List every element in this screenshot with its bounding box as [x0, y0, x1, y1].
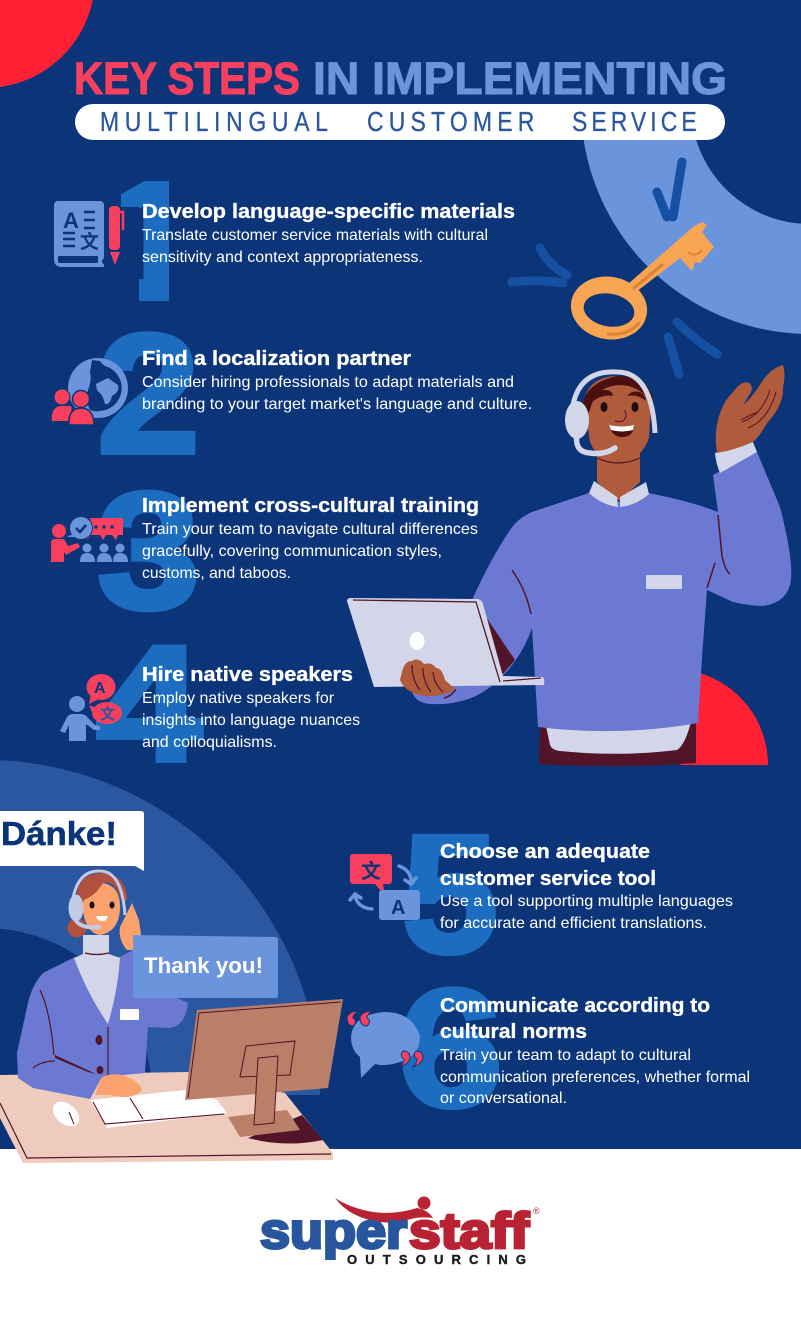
step 1 text: Develop language-specific materials — [142, 201, 515, 223]
icon: quotation speech bubble — [347, 1011, 423, 1078]
nose — [615, 410, 626, 422]
step 2 text — [142, 348, 532, 413]
step 5 text: customer service tool — [440, 868, 656, 890]
logo: Superstaff Outsourcing: OUTSOURCING — [347, 1252, 526, 1267]
speech bubble: Thank you — [133, 935, 278, 998]
step 6 text: Communicate according to — [440, 995, 710, 1017]
hair — [581, 376, 654, 425]
title: KEY STEPS — [74, 53, 300, 104]
key illustration — [512, 162, 717, 374]
sweater — [412, 452, 791, 731]
lower left ring — [0, 760, 320, 1095]
icon: translation tool: 文 — [361, 859, 381, 883]
step 1 text: sensitivity and context appropriateness. — [142, 249, 423, 266]
step 4 text: and colloquialisms. — [142, 734, 277, 751]
cuff — [715, 440, 757, 473]
step 6 text — [440, 995, 750, 1107]
speech bubble: Thank you: Thank you! — [144, 953, 263, 978]
sweater folds — [444, 515, 730, 698]
badge — [646, 575, 682, 589]
speech bubble: Danke — [0, 811, 144, 871]
red semicircle behind man — [680, 672, 768, 765]
title: IN IMPLEMENTING — [313, 53, 727, 104]
step numeral 3: 3 — [97, 459, 200, 644]
monitor base — [228, 1110, 300, 1137]
icon: translated book and pen: 文 — [80, 230, 99, 253]
mouse — [48, 1097, 84, 1131]
laptop — [347, 598, 544, 687]
step 3 text — [142, 495, 479, 582]
illustration: woman at desk — [0, 871, 343, 1163]
step numeral 5: 5 — [402, 800, 498, 988]
trousers — [539, 722, 696, 766]
step 3 text: Implement cross-cultural training — [142, 495, 479, 517]
mouth — [609, 425, 634, 437]
speech bubble: Danke: Dánke! — [1, 815, 117, 852]
subtitle pill: SERVICE — [572, 107, 697, 138]
collar — [589, 481, 649, 507]
icon: translated book and pen: A — [63, 208, 79, 233]
title — [74, 53, 727, 104]
subtitle pill: CUSTOMER — [367, 107, 534, 138]
step 3 text: Train your team to navigate cultural differences — [142, 521, 478, 538]
headset — [573, 372, 655, 433]
headset — [72, 871, 125, 915]
step 4 text: insights into language nuances — [142, 712, 360, 729]
step numeral 6: 6 — [397, 954, 503, 1142]
icon: native speaker: A — [94, 680, 106, 697]
step 5 text: Choose an adequate — [440, 841, 650, 863]
subtitle pill — [75, 104, 725, 140]
step numeral 4: 4 — [96, 612, 202, 796]
icon: trainer and audience — [51, 516, 128, 562]
eyes — [600, 402, 608, 412]
icon: translation tool — [350, 854, 420, 920]
hair — [76, 873, 127, 915]
step numeral 1: 1 — [101, 146, 209, 336]
monitor — [185, 999, 343, 1100]
step 2 text: branding to your target market's language and culture. — [142, 396, 532, 413]
step 1 text: Translate customer service materials with cultural — [142, 227, 488, 244]
face — [584, 376, 651, 463]
eyes and mouth — [90, 902, 94, 908]
step 1 text — [142, 201, 515, 266]
step 5 text: for accurate and efficient translations. — [440, 915, 707, 932]
step 4 text — [142, 664, 360, 751]
step 2 text: Find a localization partner — [142, 348, 411, 370]
step 5 text — [440, 841, 733, 932]
neck — [597, 445, 640, 500]
step 3 text: customs, and taboos. — [142, 565, 291, 582]
logo: Superstaff Outsourcing: staff — [409, 1203, 529, 1259]
step 6 text: or conversational. — [440, 1090, 567, 1107]
hand on desk — [95, 1074, 142, 1097]
icon: native speaker: 文 — [100, 705, 115, 723]
step 4 text: Employ native speakers for — [142, 690, 335, 707]
step numeral 2: 2 — [97, 300, 200, 490]
cardigan — [17, 950, 188, 1099]
icon: globe and people — [52, 358, 128, 425]
icon: translation tool: A — [391, 897, 405, 919]
bun — [68, 918, 86, 938]
motion marks — [512, 162, 717, 374]
monitor shadow — [248, 1115, 323, 1144]
step 6 text: cultural norms — [440, 1021, 587, 1043]
face — [82, 883, 120, 935]
badge — [120, 1009, 139, 1020]
light blue ring top right — [584, 140, 801, 334]
step 6 text: Train your team to adapt to cultural — [440, 1047, 691, 1064]
subtitle pill: MULTILINGUAL — [100, 107, 328, 138]
maroon inner arm — [486, 617, 515, 675]
buttons — [96, 1035, 102, 1045]
illustration: man with laptop — [347, 365, 791, 766]
icon: translated book and pen — [54, 201, 123, 267]
step 6 text: communication preferences, whether formal — [440, 1069, 750, 1086]
decorative red circle — [0, 0, 95, 88]
desk — [0, 1072, 333, 1163]
icon: native speaker — [60, 674, 122, 741]
hand at headset — [120, 903, 141, 950]
turtleneck — [74, 935, 120, 1024]
step 4 text: Hire native speakers — [142, 664, 353, 686]
step 5 text: Use a tool supporting multiple languages — [440, 893, 733, 910]
logo: Superstaff Outsourcing — [260, 1196, 540, 1267]
raised hand — [716, 365, 784, 453]
step 2 text: Consider hiring professionals to adapt materials and — [142, 374, 514, 391]
step 3 text: gracefully, covering communication styles, — [142, 543, 442, 560]
logo: Superstaff Outsourcing: super — [260, 1203, 407, 1259]
hand on laptop — [400, 660, 455, 696]
keyboard — [90, 1090, 227, 1128]
logo: Superstaff Outsourcing: ® — [533, 1206, 540, 1216]
shirt hem — [546, 722, 691, 754]
